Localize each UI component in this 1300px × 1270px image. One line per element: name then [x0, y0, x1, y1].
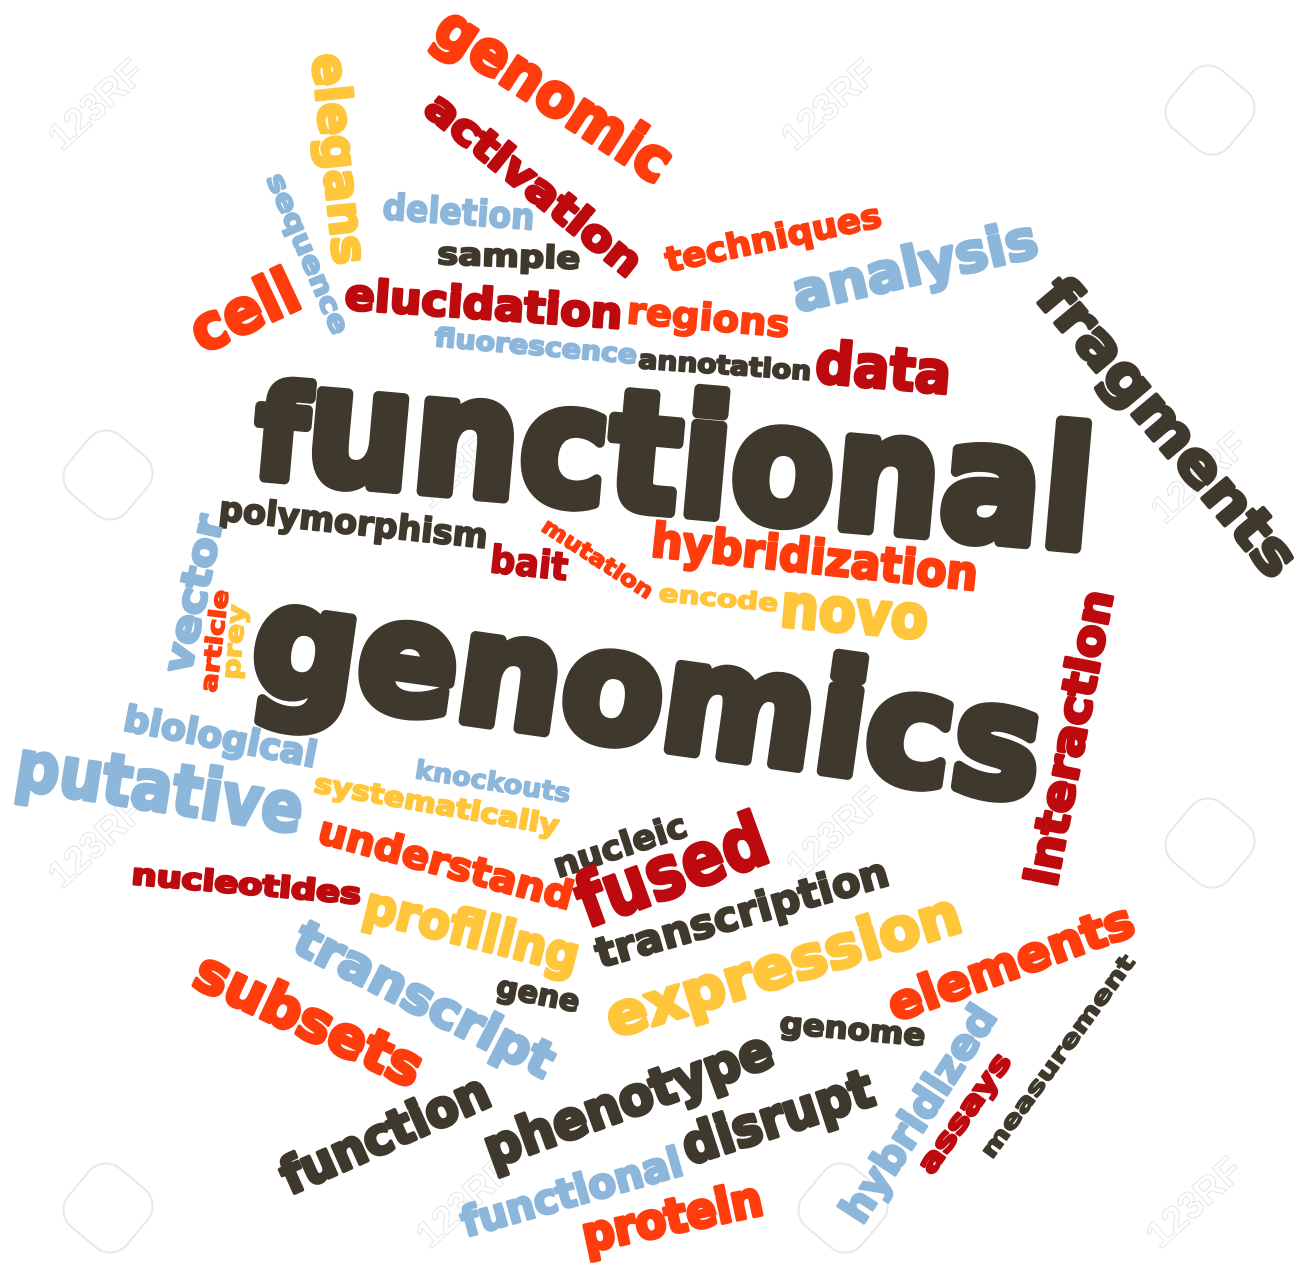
- watermarks: 123RF: [408, 409, 521, 517]
- watermarks: 123RF: [773, 51, 886, 159]
- word: vector: vector: [155, 511, 233, 677]
- word: fragments: fragments: [1023, 263, 1300, 590]
- word: transcription: transcription: [590, 848, 894, 978]
- watermarks: 123RF: [40, 51, 153, 159]
- word: cell: cell: [177, 254, 311, 368]
- word: prey: prey: [216, 603, 252, 681]
- word: measurement: measurement: [976, 950, 1141, 1164]
- word: bait: bait: [488, 537, 570, 589]
- word: gene: gene: [493, 969, 583, 1020]
- word: functional: functional: [249, 324, 1102, 588]
- word: elucidation: elucidation: [343, 270, 624, 339]
- word: putative: putative: [10, 724, 310, 850]
- word: interaction: interaction: [1015, 585, 1124, 890]
- watermarks: 123RF: [1138, 1149, 1251, 1257]
- word: hybridized: hybridized: [830, 996, 1007, 1231]
- word: function: function: [271, 1062, 499, 1206]
- word: data: data: [813, 328, 954, 408]
- word: activation: activation: [416, 82, 652, 287]
- word: fused: fused: [564, 796, 779, 945]
- watermarks: 123RF: [1143, 424, 1256, 532]
- word: analysis: analysis: [786, 207, 1044, 325]
- word: knockouts: knockouts: [413, 755, 573, 809]
- word: mutation: mutation: [537, 514, 658, 605]
- word: sequence: sequence: [260, 169, 355, 339]
- word: elements: elements: [880, 892, 1142, 1033]
- watermarks: 123RF: [778, 779, 891, 887]
- word: protein: protein: [577, 1171, 767, 1264]
- word: fluorescence: fluorescence: [433, 323, 638, 371]
- word: disrupt: disrupt: [674, 1058, 881, 1177]
- word: elegans: elegans: [300, 50, 378, 267]
- word: novo: novo: [778, 571, 931, 654]
- word: assays: assays: [910, 1046, 1018, 1180]
- word: sample: sample: [437, 236, 581, 277]
- word: genome: genome: [778, 1006, 927, 1054]
- word: phenotype: phenotype: [476, 1019, 781, 1180]
- word: regions: regions: [625, 289, 791, 346]
- watermarks: 123RF: [408, 1149, 521, 1257]
- word: nucleotides: nucleotides: [130, 857, 362, 911]
- word: hybridization: hybridization: [649, 513, 981, 602]
- word: article: article: [196, 588, 235, 694]
- word: techniques: techniques: [662, 196, 885, 281]
- word: deletion: deletion: [381, 187, 536, 239]
- word: annotation: annotation: [638, 345, 812, 387]
- word: systematically: systematically: [312, 768, 562, 842]
- word: nucleic: nucleic: [548, 806, 692, 887]
- word: expression: expression: [597, 879, 969, 1051]
- watermarks: 123RF: [40, 789, 153, 897]
- word: biological: biological: [120, 699, 321, 776]
- word: encode: encode: [657, 579, 779, 617]
- word: subsets: subsets: [184, 939, 434, 1101]
- word: understand: understand: [313, 808, 578, 919]
- word: functional small: functional: [456, 1138, 688, 1247]
- word: transcript: transcript: [285, 909, 565, 1090]
- word: genomics: genomics: [242, 547, 1054, 837]
- word: polymorphism: polymorphism: [217, 489, 490, 557]
- word: profiling: profiling: [358, 875, 586, 985]
